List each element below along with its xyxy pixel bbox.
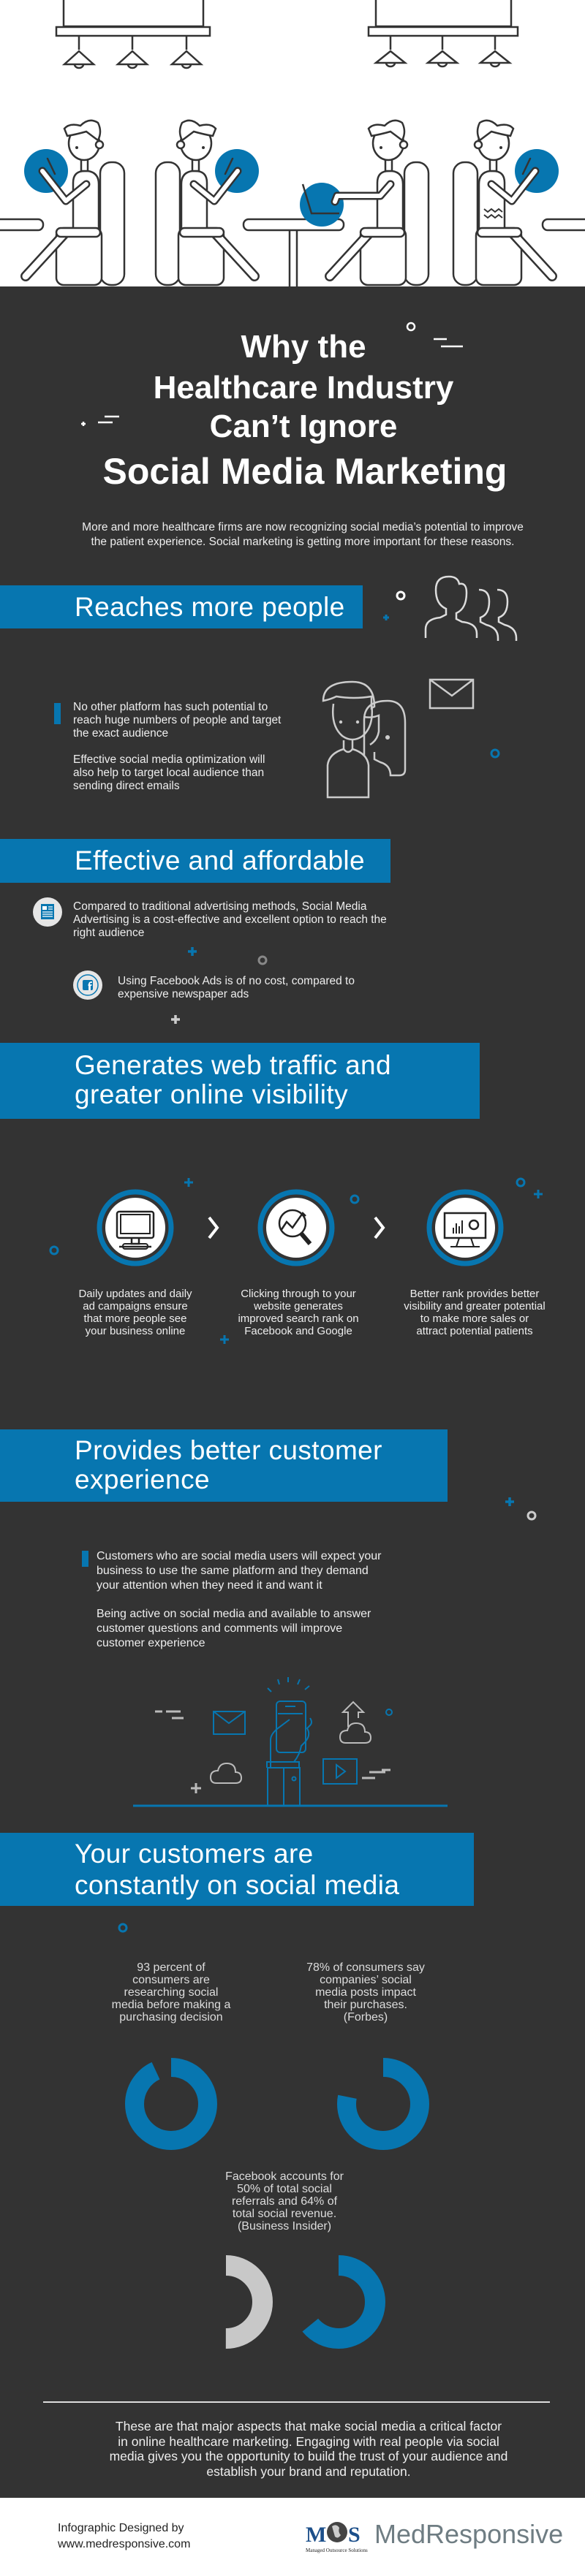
text: customer experience: your attention when they need it and want it [97, 1579, 322, 1592]
caption 2: website generates [254, 1300, 343, 1312]
intro text: More and more healthcare firms are now recognizing social media’s potential to improve [82, 521, 524, 533]
text: customer experience: customer experience [97, 1637, 205, 1649]
stat 2 text: media posts impact [315, 1986, 416, 1999]
divider [43, 2401, 550, 2403]
stat 3 text: (Business Insider) [238, 2220, 331, 2233]
stat 2 text: companies’ social [320, 1974, 412, 1986]
icon: person pair [322, 678, 500, 798]
stat 3 text: total social revenue. [233, 2208, 336, 2220]
logo [306, 2519, 563, 2553]
title line 3: Can’t Ignore [210, 409, 397, 444]
title: Why the [241, 329, 366, 365]
stat 1 text: consumers are [132, 1974, 210, 1986]
icon: people group [383, 576, 518, 641]
heading: customer experience: experience [75, 1464, 210, 1494]
logo: MedResponsive [374, 2519, 563, 2549]
text: customer experience: business to use the same platform and they demand [97, 1565, 369, 1577]
caption 2: improved search rank on [238, 1312, 359, 1325]
caption 3: to make more sales or [420, 1312, 529, 1325]
heading: generates web traffic: greater online visibility [75, 1079, 348, 1109]
process: web traffic steps [50, 1178, 543, 1344]
decorations affordable [171, 947, 268, 1024]
text: reaches more people: No other platform has such potential to [73, 701, 268, 713]
intro text: the patient experience. Social marketing is getting more important for these reasons. [91, 536, 514, 548]
person 4 [453, 121, 559, 285]
item: newspaper [33, 897, 387, 939]
decor [505, 1497, 537, 1520]
stat 3 text [225, 2170, 344, 2233]
item: facebook [73, 970, 355, 1000]
text: reaches more people: also help to target local audience than [73, 767, 264, 779]
heading: reaches more people: Reaches more people [75, 592, 345, 622]
stat 1 text: 93 percent of [137, 1961, 205, 1974]
heading: customer experience [0, 1429, 448, 1502]
closing text: establish your brand and reputation. [206, 2464, 411, 2479]
heading: customer experience: Provides better customer [75, 1435, 382, 1465]
text: customer experience: customer questions and comments will improve [97, 1622, 342, 1635]
heading: customers on social media: Your customers are [75, 1839, 314, 1869]
logo: S [348, 2523, 361, 2547]
item: newspaper: Compared to traditional advertising methods, Social Media [73, 900, 367, 913]
heading: customers on social media: constantly on social media [75, 1870, 399, 1900]
decor circle [118, 1923, 127, 1932]
heading: generates web traffic [0, 1043, 480, 1119]
title decorations [81, 322, 463, 426]
heading: effective and affordable: Effective and affordable [75, 846, 365, 875]
stat 2 text [306, 1961, 425, 2024]
caption 3 [404, 1288, 546, 1337]
item: newspaper: right audience [73, 927, 144, 939]
closing text [110, 2419, 507, 2479]
stat 2 text: their purchases. [324, 1999, 407, 2011]
footer [0, 2498, 585, 2576]
logo: Managed Outsource Solutions [306, 2547, 368, 2553]
closing text: in online healthcare marketing. Engaging with real people via social [118, 2433, 499, 2448]
caption 1: ad campaigns ensure [83, 1300, 188, 1312]
caption 3: attract potential patients [416, 1325, 533, 1337]
closing text: media gives you the opportunity to build the trust of your audience and [110, 2449, 507, 2463]
caption 2: Clicking through to your [241, 1288, 356, 1300]
person 1 [24, 121, 124, 285]
donut charts 50% and 64% [225, 2255, 385, 2349]
person 2 [156, 121, 259, 285]
credit text [58, 2522, 190, 2550]
caption 2 [238, 1288, 359, 1337]
text: customer experience [82, 1550, 382, 1649]
heading: effective and affordable [0, 839, 390, 883]
caption 1: your business online [86, 1325, 185, 1337]
text: customer experience: Being active on social media and available to answer [97, 1608, 371, 1620]
stat 1 text: media before making a [112, 1999, 230, 2011]
title line 2: Healthcare Industry [154, 370, 453, 406]
item: facebook: Using Facebook Ads is of no cost, compared to [118, 975, 355, 987]
heading: customers on social media [0, 1833, 474, 1906]
closing text: These are that major aspects that make social media a critical factor [116, 2419, 502, 2433]
stat 1 text [112, 1961, 231, 2024]
title line 4: Social Media Marketing [103, 451, 507, 492]
text: customer experience: Customers who are social media users will expect your [97, 1550, 381, 1562]
lamp shelf right [369, 0, 518, 67]
stat 3 text: Facebook accounts for [225, 2170, 344, 2183]
caption 1: Daily updates and daily [78, 1288, 192, 1300]
caption 1: that more people see [84, 1312, 186, 1325]
text: reaches more people: the exact audience [73, 727, 168, 740]
stat 1 text: purchasing decision [119, 2011, 223, 2024]
credit text: Infographic Designed by [58, 2522, 184, 2534]
text: reaches more people: Effective social media optimization will [73, 753, 265, 766]
stat 1 text: researching social [124, 1986, 218, 1999]
caption 2: Facebook and Google [244, 1325, 352, 1337]
stat 2 text: 78% of consumers say [306, 1961, 425, 1974]
text: reaches more people [54, 701, 281, 792]
caption 3: Better rank provides better [410, 1288, 539, 1300]
heading: generates web traffic: Generates web traffic and [75, 1050, 391, 1080]
item: newspaper: Advertising is a cost-effective and excellent option to reach the [73, 913, 387, 926]
stat 3 text: 50% of total social [237, 2183, 332, 2195]
logo: M [306, 2523, 326, 2547]
text: reaches more people: reach huge numbers of people and target [73, 714, 281, 726]
text: reaches more people: sending direct emails [73, 780, 180, 792]
heading: reaches more people [0, 585, 363, 628]
caption 3: visibility and greater potential [404, 1300, 546, 1312]
credit text: www.medresponsive.com [58, 2538, 190, 2550]
person 3 with laptop [300, 121, 429, 285]
lamp shelf left [56, 0, 210, 68]
caption 1 [78, 1288, 192, 1337]
item: facebook: expensive newspaper ads [118, 988, 249, 1000]
stat 2 text: (Forbes) [344, 2011, 388, 2024]
illustration: hand with phone [133, 1677, 448, 1806]
hero illustration [0, 0, 585, 286]
intro text [82, 521, 524, 548]
stat 3 text: referrals and 64% of [232, 2195, 337, 2208]
tables [0, 219, 585, 288]
donut charts 93% and 78% [125, 2058, 429, 2150]
